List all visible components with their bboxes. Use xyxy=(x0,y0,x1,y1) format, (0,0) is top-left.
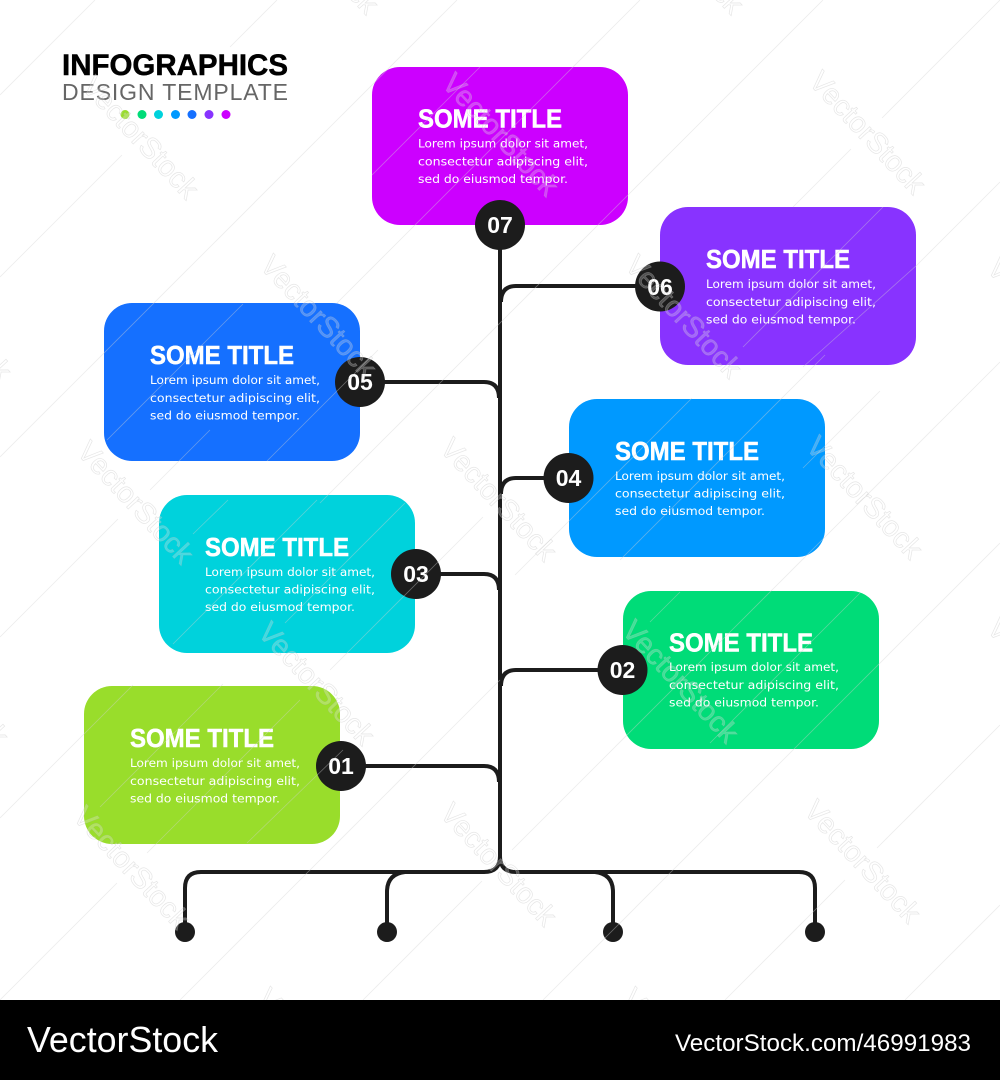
footer image id: VectorStock.com/46991983 xyxy=(675,1030,971,1057)
text: VectorStock xyxy=(619,249,748,385)
text: VectorStock xyxy=(436,67,565,203)
panel: card 07: SOME TITLE xyxy=(418,106,562,134)
number badge 01: 01 xyxy=(328,753,354,779)
number badge 05 xyxy=(335,357,385,407)
text: VectorStock xyxy=(803,65,932,201)
text: VectorStock xyxy=(800,430,929,566)
text: VectorStock xyxy=(67,800,196,936)
panel: card 05: SOME TITLE xyxy=(150,342,294,370)
subtitle: DESIGN TEMPLATE xyxy=(62,79,288,105)
panel: card 04: sed do eiusmod tempor. xyxy=(615,505,765,518)
number badge 02 xyxy=(598,645,648,695)
panel: card 07: consectetur adipiscing elit, xyxy=(418,156,588,168)
text: VectorStock xyxy=(71,435,200,571)
panel: card 06: sed do eiusmod tempor. xyxy=(706,314,856,326)
panel: card 03: SOME TITLE xyxy=(205,534,349,562)
number badge 04 xyxy=(544,453,594,503)
footer bar xyxy=(0,1000,1000,1080)
panel: card 04: Lorem ipsum dolor sit amet, xyxy=(615,470,785,483)
number badge 06 xyxy=(635,262,685,312)
number badge 06: 06 xyxy=(647,274,673,300)
panel: card 04 xyxy=(569,399,825,557)
panel: card 04: SOME TITLE xyxy=(615,438,759,466)
panel: card 05: sed do eiusmod tempor. xyxy=(150,410,300,422)
number badge 07: 07 xyxy=(487,212,513,238)
root end dots xyxy=(175,922,825,942)
panel: card 04: consectetur adipiscing elit, xyxy=(615,488,785,500)
header: infographics title xyxy=(62,49,288,119)
panel: card 02: consectetur adipiscing elit, xyxy=(669,679,839,692)
panel: card 05: Lorem ipsum dolor sit amet, xyxy=(150,374,320,387)
panel: card 02: SOME TITLE xyxy=(669,630,813,658)
panel: card 01: Lorem ipsum dolor sit amet, xyxy=(130,757,300,770)
panel: card 07: sed do eiusmod tempor. xyxy=(418,173,568,186)
number badge 05: 05 xyxy=(347,369,373,395)
panel: card 03 xyxy=(159,495,415,653)
panel: card 05 xyxy=(104,303,360,461)
number badge 03: 03 xyxy=(403,561,429,587)
number badge 07 xyxy=(475,200,525,250)
text: VectorStock xyxy=(434,432,563,568)
text: VectorStock xyxy=(434,797,563,933)
panel: card 03: consectetur adipiscing elit, xyxy=(205,584,375,596)
text: VectorStock xyxy=(616,614,745,750)
panel: card 06: Lorem ipsum dolor sit amet, xyxy=(706,278,876,291)
text: VectorStock xyxy=(76,70,205,206)
panel: card 01: SOME TITLE xyxy=(130,725,274,753)
panel: card 05: consectetur adipiscing elit, xyxy=(150,392,320,405)
panel: card 06: consectetur adipiscing elit, xyxy=(706,296,876,309)
title: INFOGRAPHICS xyxy=(62,49,288,82)
panel: card 03: Lorem ipsum dolor sit amet, xyxy=(205,566,375,579)
text: VectorStock xyxy=(252,616,381,752)
tree connector lines xyxy=(185,225,815,932)
footer logo text: VectorStock xyxy=(27,1019,219,1060)
colour dots xyxy=(120,110,230,119)
panel: card 01: sed do eiusmod tempor. xyxy=(130,792,280,806)
panel: card 02: Lorem ipsum dolor sit amet, xyxy=(669,661,839,674)
panel: card 02: sed do eiusmod tempor. xyxy=(669,696,819,710)
panel: card 01 xyxy=(84,686,340,844)
text: VectorStock xyxy=(254,249,383,385)
panel: card 03: sed do eiusmod tempor. xyxy=(205,601,355,614)
number badge 03 xyxy=(391,549,441,599)
number badge 04: 04 xyxy=(556,465,581,491)
panel: card 02 xyxy=(623,591,879,749)
number badge 02: 02 xyxy=(610,657,635,683)
panel: card 07 xyxy=(372,67,628,225)
panel: card 06: SOME TITLE xyxy=(706,246,850,274)
text: VectorStock xyxy=(798,794,927,930)
panel: card 07: Lorem ipsum dolor sit amet, xyxy=(418,138,588,150)
panel: card 06 xyxy=(660,207,916,365)
panel: card 01: consectetur adipiscing elit, xyxy=(130,775,300,788)
number badge 01 xyxy=(316,741,366,791)
